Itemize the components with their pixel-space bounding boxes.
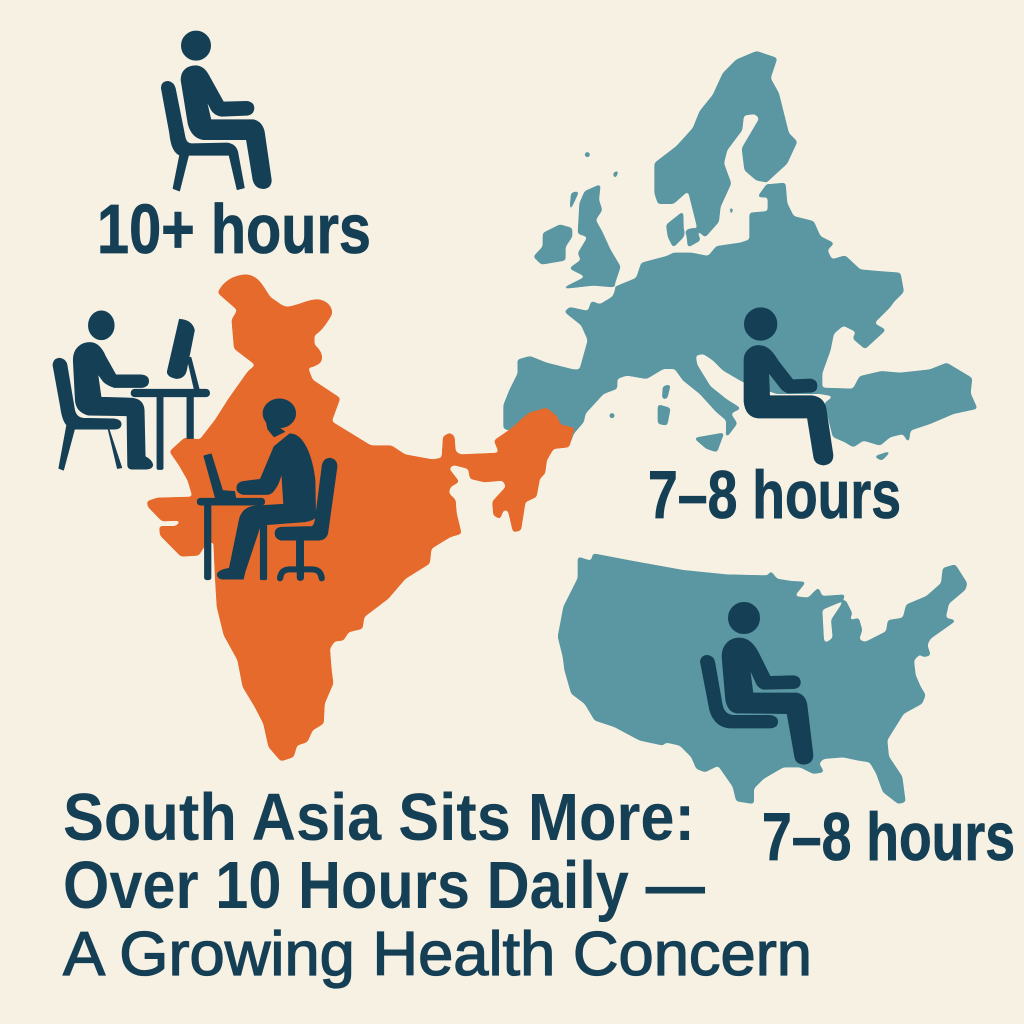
label: Europe 7–8 hours: 7–8 hours	[648, 457, 901, 533]
title: A Growing Health Concern	[63, 920, 812, 989]
label: 10+ hours: 10+ hours	[97, 190, 371, 268]
title: Over 10 Hours Daily —	[63, 848, 705, 923]
map: United States	[558, 554, 967, 803]
icon: person at laptop over India	[197, 399, 337, 580]
Great Britain	[563, 185, 620, 288]
title: South Asia Sits More:	[63, 780, 695, 855]
Ireland	[534, 225, 572, 264]
map: India highlighted	[147, 275, 574, 761]
Europe mainland	[504, 183, 977, 447]
title	[63, 780, 812, 989]
icon: person at desktop computer	[53, 311, 209, 470]
icon: seated person, South Asia	[162, 31, 271, 191]
small islands	[570, 171, 890, 460]
icon: seated person, Europe	[744, 308, 833, 465]
Scandinavia	[655, 52, 797, 237]
map: Europe	[504, 52, 977, 460]
icon: seated person, United States	[701, 603, 813, 764]
